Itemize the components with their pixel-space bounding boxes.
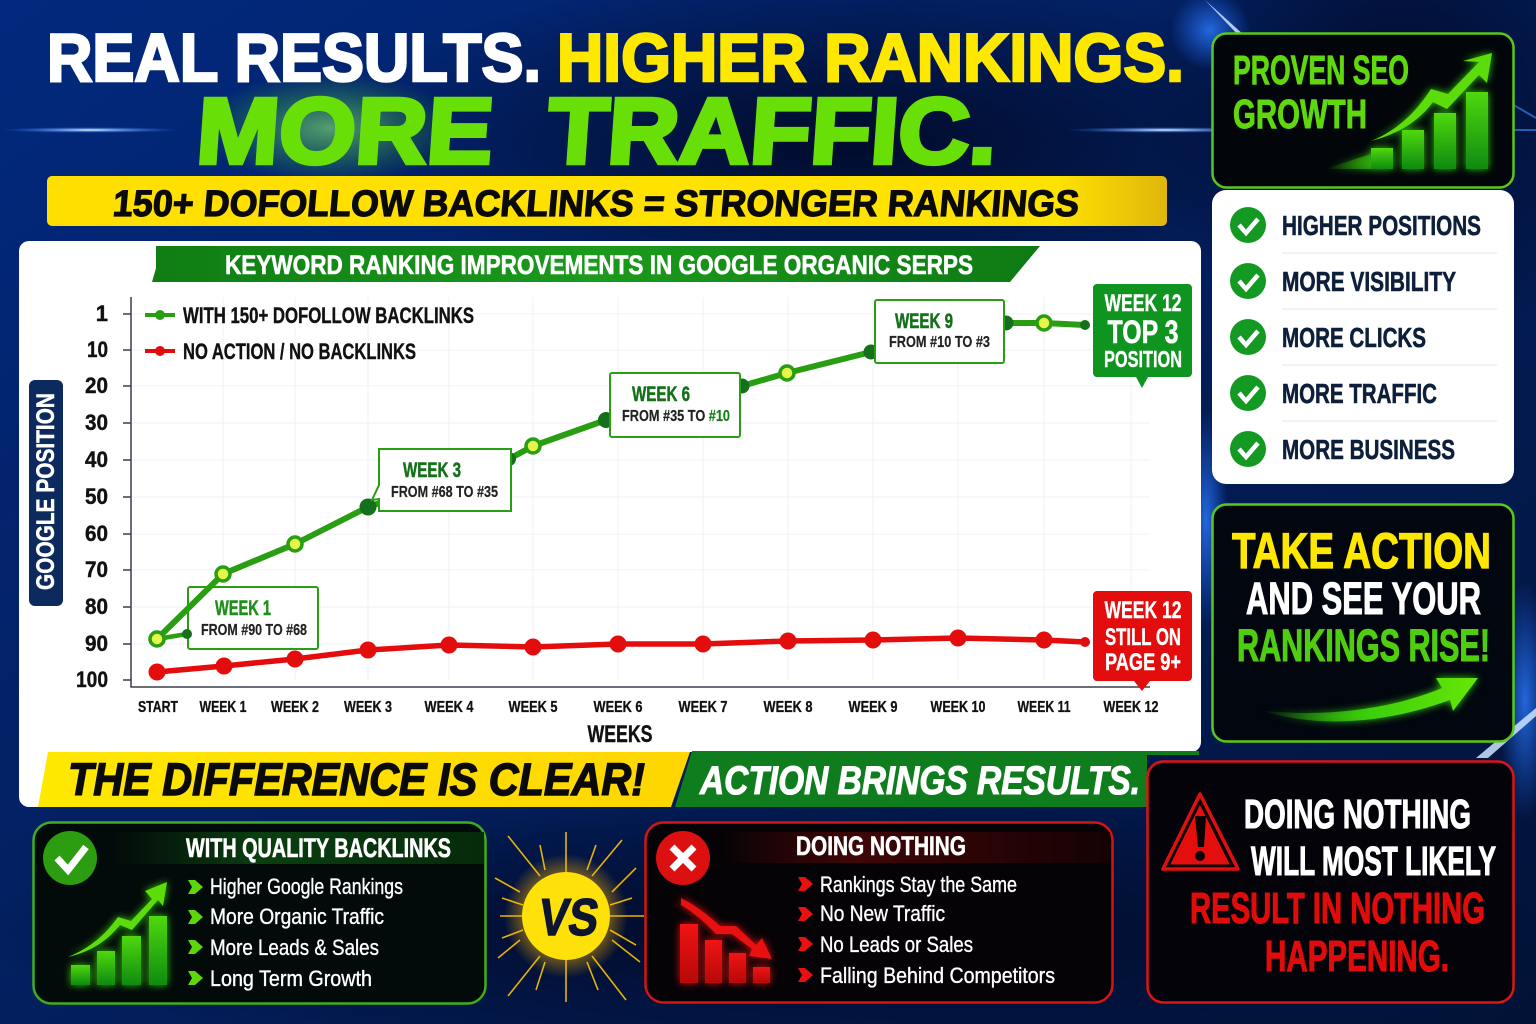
y axis labels: 100 [76,667,108,692]
callout: week 9: WEEK 9 [895,310,953,333]
x axis labels: WEEK 11 [1018,699,1071,716]
x axis labels: WEEK 3 [344,699,392,716]
y axis labels: 20 [85,373,108,398]
panel: checklist [1212,190,1514,484]
y axis labels: 40 [85,447,108,472]
red line series [148,630,1090,680]
y axis labels: 30 [85,410,108,435]
heading [1233,47,1409,137]
legend [145,303,474,364]
y axis title [29,380,63,606]
title line: higher rankings: HIGHER RANKINGS. [557,20,1184,96]
callout: week 1: WEEK 1 [215,597,271,620]
benefit list [188,874,403,991]
x axis title: WEEKS [588,721,652,748]
check item: more visibility [1230,263,1456,299]
check item: more visibility: MORE VISIBILITY [1282,266,1456,297]
check item: more clicks: MORE CLICKS [1282,322,1426,353]
consequence list [798,872,1055,988]
heading: DOING NOTHING [796,831,966,861]
consequence list: Falling Behind Competitors [820,963,1055,988]
legend: NO ACTION / NO BACKLINKS [183,339,416,364]
consequence list: Rankings Stay the Same [820,872,1017,897]
callout: week 3 [372,449,511,511]
check item: more clicks [1230,319,1426,355]
heading: WITH QUALITY BACKLINKS [186,833,451,863]
x axis labels: WEEK 8 [764,699,813,716]
legend: WITH 150+ DOFOLLOW BACKLINKS [183,303,474,328]
x axis labels: WEEK 6 [594,699,643,716]
callout: week 12 top 3: WEEK 12 [1104,290,1182,317]
y axis labels: 80 [85,594,108,619]
heading: GROWTH [1233,91,1367,137]
benefit list: Long Term Growth [210,966,372,991]
panel: doing nothing [646,822,1112,1002]
x axis labels: WEEK 10 [930,699,986,716]
callout: week 12 top 3 [1093,284,1192,388]
x axis labels [138,699,1159,716]
call to action text [1232,523,1491,671]
x axis labels: WEEK 1 [200,699,247,716]
check item: more traffic: MORE TRAFFIC [1282,378,1437,409]
x axis labels: WEEK 5 [508,699,558,716]
y axis labels: 50 [85,484,108,509]
check item: more business: MORE BUSINESS [1282,434,1455,465]
warning text [1190,791,1496,981]
callout: week 12 page 9+: WEEK 12 [1104,597,1182,624]
warning text: HAPPENING. [1265,932,1449,981]
icon: check badge [43,831,97,885]
grid [131,297,1150,680]
callout: week 12 page 9+: STILL ON [1105,624,1181,651]
callout: week 1 [188,587,318,649]
x axis labels: WEEK 9 [848,699,898,716]
y axis labels: 60 [85,521,108,546]
callout: week 12 top 3: TOP 3 [1108,314,1178,350]
callout: week 9: FROM #10 TO #3 [889,334,990,351]
x axis labels: WEEK 2 [271,699,319,716]
title [47,20,1184,183]
title line: more traffic: MORE TRAFFIC. [194,79,1001,183]
y axis labels: 70 [85,557,108,582]
yellow banner: 150+ DOFOLLOW BACKLINKS = STRONGER RANKINGS [111,182,1081,224]
benefit list: More Organic Traffic [210,904,384,929]
green line series [150,316,1090,646]
callout: week 1: FROM #90 TO #68 [201,622,307,639]
y axis labels [76,301,108,692]
callout: week 3: WEEK 3 [403,459,461,482]
callout: week 12 top 3: POSITION [1104,346,1182,372]
icon: growth chart [68,882,167,985]
x axis labels: WEEK 12 [1104,699,1159,716]
title line: real results: REAL RESULTS. [47,20,541,96]
callout: week 9 [875,300,1004,363]
panel: take action [1212,504,1514,752]
y axis labels: 1 [96,301,108,326]
check item: more business [1230,431,1455,467]
icon: growth chart [1325,53,1492,169]
x axis labels: START [138,699,178,716]
arrow: rising [1260,678,1478,721]
panel: warning [1148,762,1514,1002]
panel: with quality backlinks [34,822,486,1004]
consequence list: No Leads or Sales [820,932,973,957]
y axis title: GOOGLE POSITION [32,393,60,590]
heading: PROVEN SEO [1233,47,1409,93]
callout: week 6: WEEK 6 [632,383,690,406]
callout: week 6: FROM #35 TO #10 [622,408,730,425]
chart heading ribbon: KEYWORD RANKING IMPROVEMENTS IN GOOGLE ORGANIC SERPS [225,250,973,280]
consequence list: No New Traffic [820,901,945,926]
vs badge [495,832,644,1002]
icon: x badge [656,831,710,885]
banner: the difference is clear: THE DIFFERENCE IS CLEAR! [68,754,645,805]
benefit list: More Leads & Sales [210,935,379,960]
callout: week 3: FROM #68 TO #35 [391,484,498,501]
callout: week 6 [610,373,740,437]
panel: proven seo growth [1212,34,1514,188]
callout: week 12 page 9+ [1093,591,1192,691]
vs badge: VS [535,889,602,947]
check item: more traffic [1230,375,1437,411]
callout: week 12 page 9+: PAGE 9+ [1105,649,1181,676]
y axis labels: 90 [85,631,108,656]
x axis labels: WEEK 4 [424,699,474,716]
y axis labels: 10 [87,337,108,362]
x axis labels: WEEK 7 [678,699,728,716]
axes [123,297,1150,687]
icon: warning triangle [1163,794,1238,869]
benefit list: Higher Google Rankings [210,874,403,899]
check item: higher positions [1230,207,1481,243]
banner: action brings results: ACTION BRINGS RESULTS. [699,759,1140,803]
panel: chart [19,241,1201,807]
icon: declining chart [680,898,772,983]
